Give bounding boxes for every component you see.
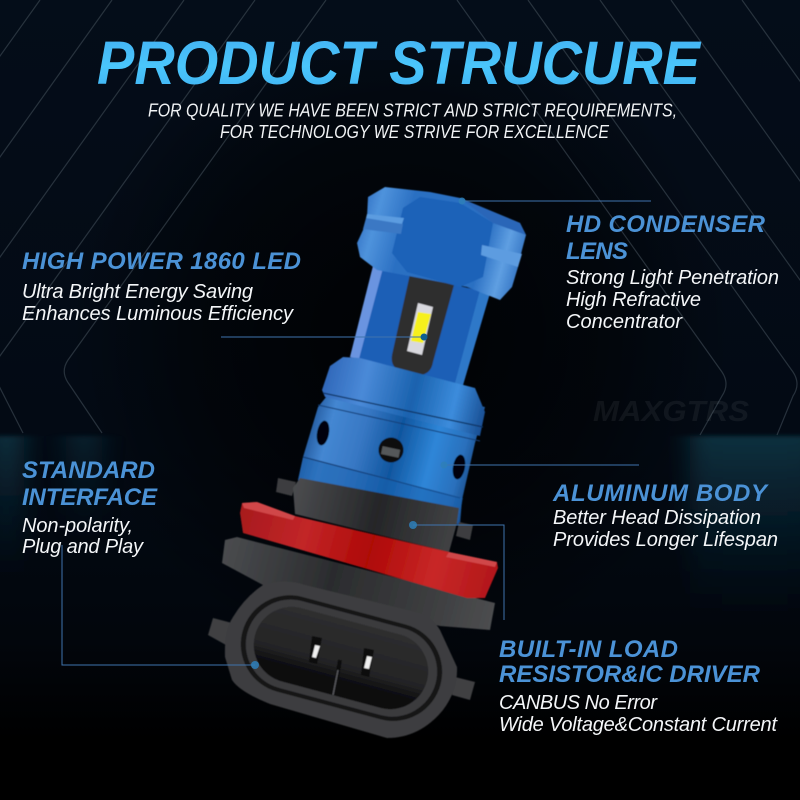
callout: aluminum body: [552, 480, 778, 551]
LED board: [392, 274, 454, 375]
subtitle: [148, 100, 677, 142]
callout: standard interface: STANDARD: [22, 457, 155, 484]
callout: high power LED: Enhances Luminous Efficiency: [22, 303, 294, 325]
aluminum body: [298, 357, 485, 525]
callout: standard interface: Plug and Play: [22, 536, 144, 558]
bulb head: [357, 187, 526, 300]
callout: built-in load resistor and IC driver: BUILT-IN LOAD: [499, 636, 678, 663]
callout: HD condenser lens: Strong Light Penetration: [566, 267, 779, 289]
cavity: [245, 598, 437, 718]
callout: high power LED: HIGH POWER 1860 LED: [22, 248, 301, 275]
black flange ring: [222, 537, 495, 630]
plug connector: [208, 582, 475, 738]
callout: standard interface: [22, 457, 158, 558]
subtitle: FOR QUALITY WE HAVE BEEN STRICT AND STRICT REQUIREMENTS,: [148, 100, 677, 120]
connector pins: [309, 636, 374, 677]
bulb neck: [350, 266, 490, 385]
callout: aluminum body: Provides Longer Lifespan: [553, 529, 778, 551]
callout: aluminum body: ALUMINUM BODY: [552, 480, 769, 507]
callout: HD condenser lens: Concentrator: [566, 311, 683, 333]
callout: built-in load resistor and IC driver: CANBUS No Error: [499, 692, 658, 714]
callout: built-in load resistor and IC driver: RESISTOR&IC DRIVER: [499, 661, 761, 688]
callout: HD condenser lens: High Refractive: [566, 289, 701, 311]
leader lines: [62, 201, 651, 665]
LED chip: [407, 303, 433, 355]
callout: high power LED: Ultra Bright Energy Saving: [22, 281, 253, 303]
callout: aluminum body: Better Head Dissipation: [553, 507, 761, 529]
callout: built-in load resistor and IC driver: Wide Voltage&Constant Current: [499, 714, 778, 736]
callout: HD condenser lens: [566, 211, 779, 333]
watermark: MAXGTRS: [593, 396, 750, 428]
red base ring: [240, 502, 498, 598]
callout: standard interface: INTERFACE: [22, 484, 158, 511]
callout: high power LED: [22, 248, 301, 325]
title: PRODUCT STRUCURE: [97, 29, 702, 97]
black collar: [276, 478, 473, 552]
callout: HD condenser lens: HD CONDENSER: [566, 211, 766, 238]
LED bulb product: [208, 187, 526, 738]
leader dots: [251, 198, 466, 669]
subtitle: FOR TECHNOLOGY WE STRIVE FOR EXCELLENCE: [220, 121, 610, 142]
callout: built-in load resistor and IC driver: [499, 636, 778, 736]
callout: standard interface: Non-polarity,: [22, 515, 133, 537]
callout: HD condenser lens: LENS: [566, 238, 628, 265]
